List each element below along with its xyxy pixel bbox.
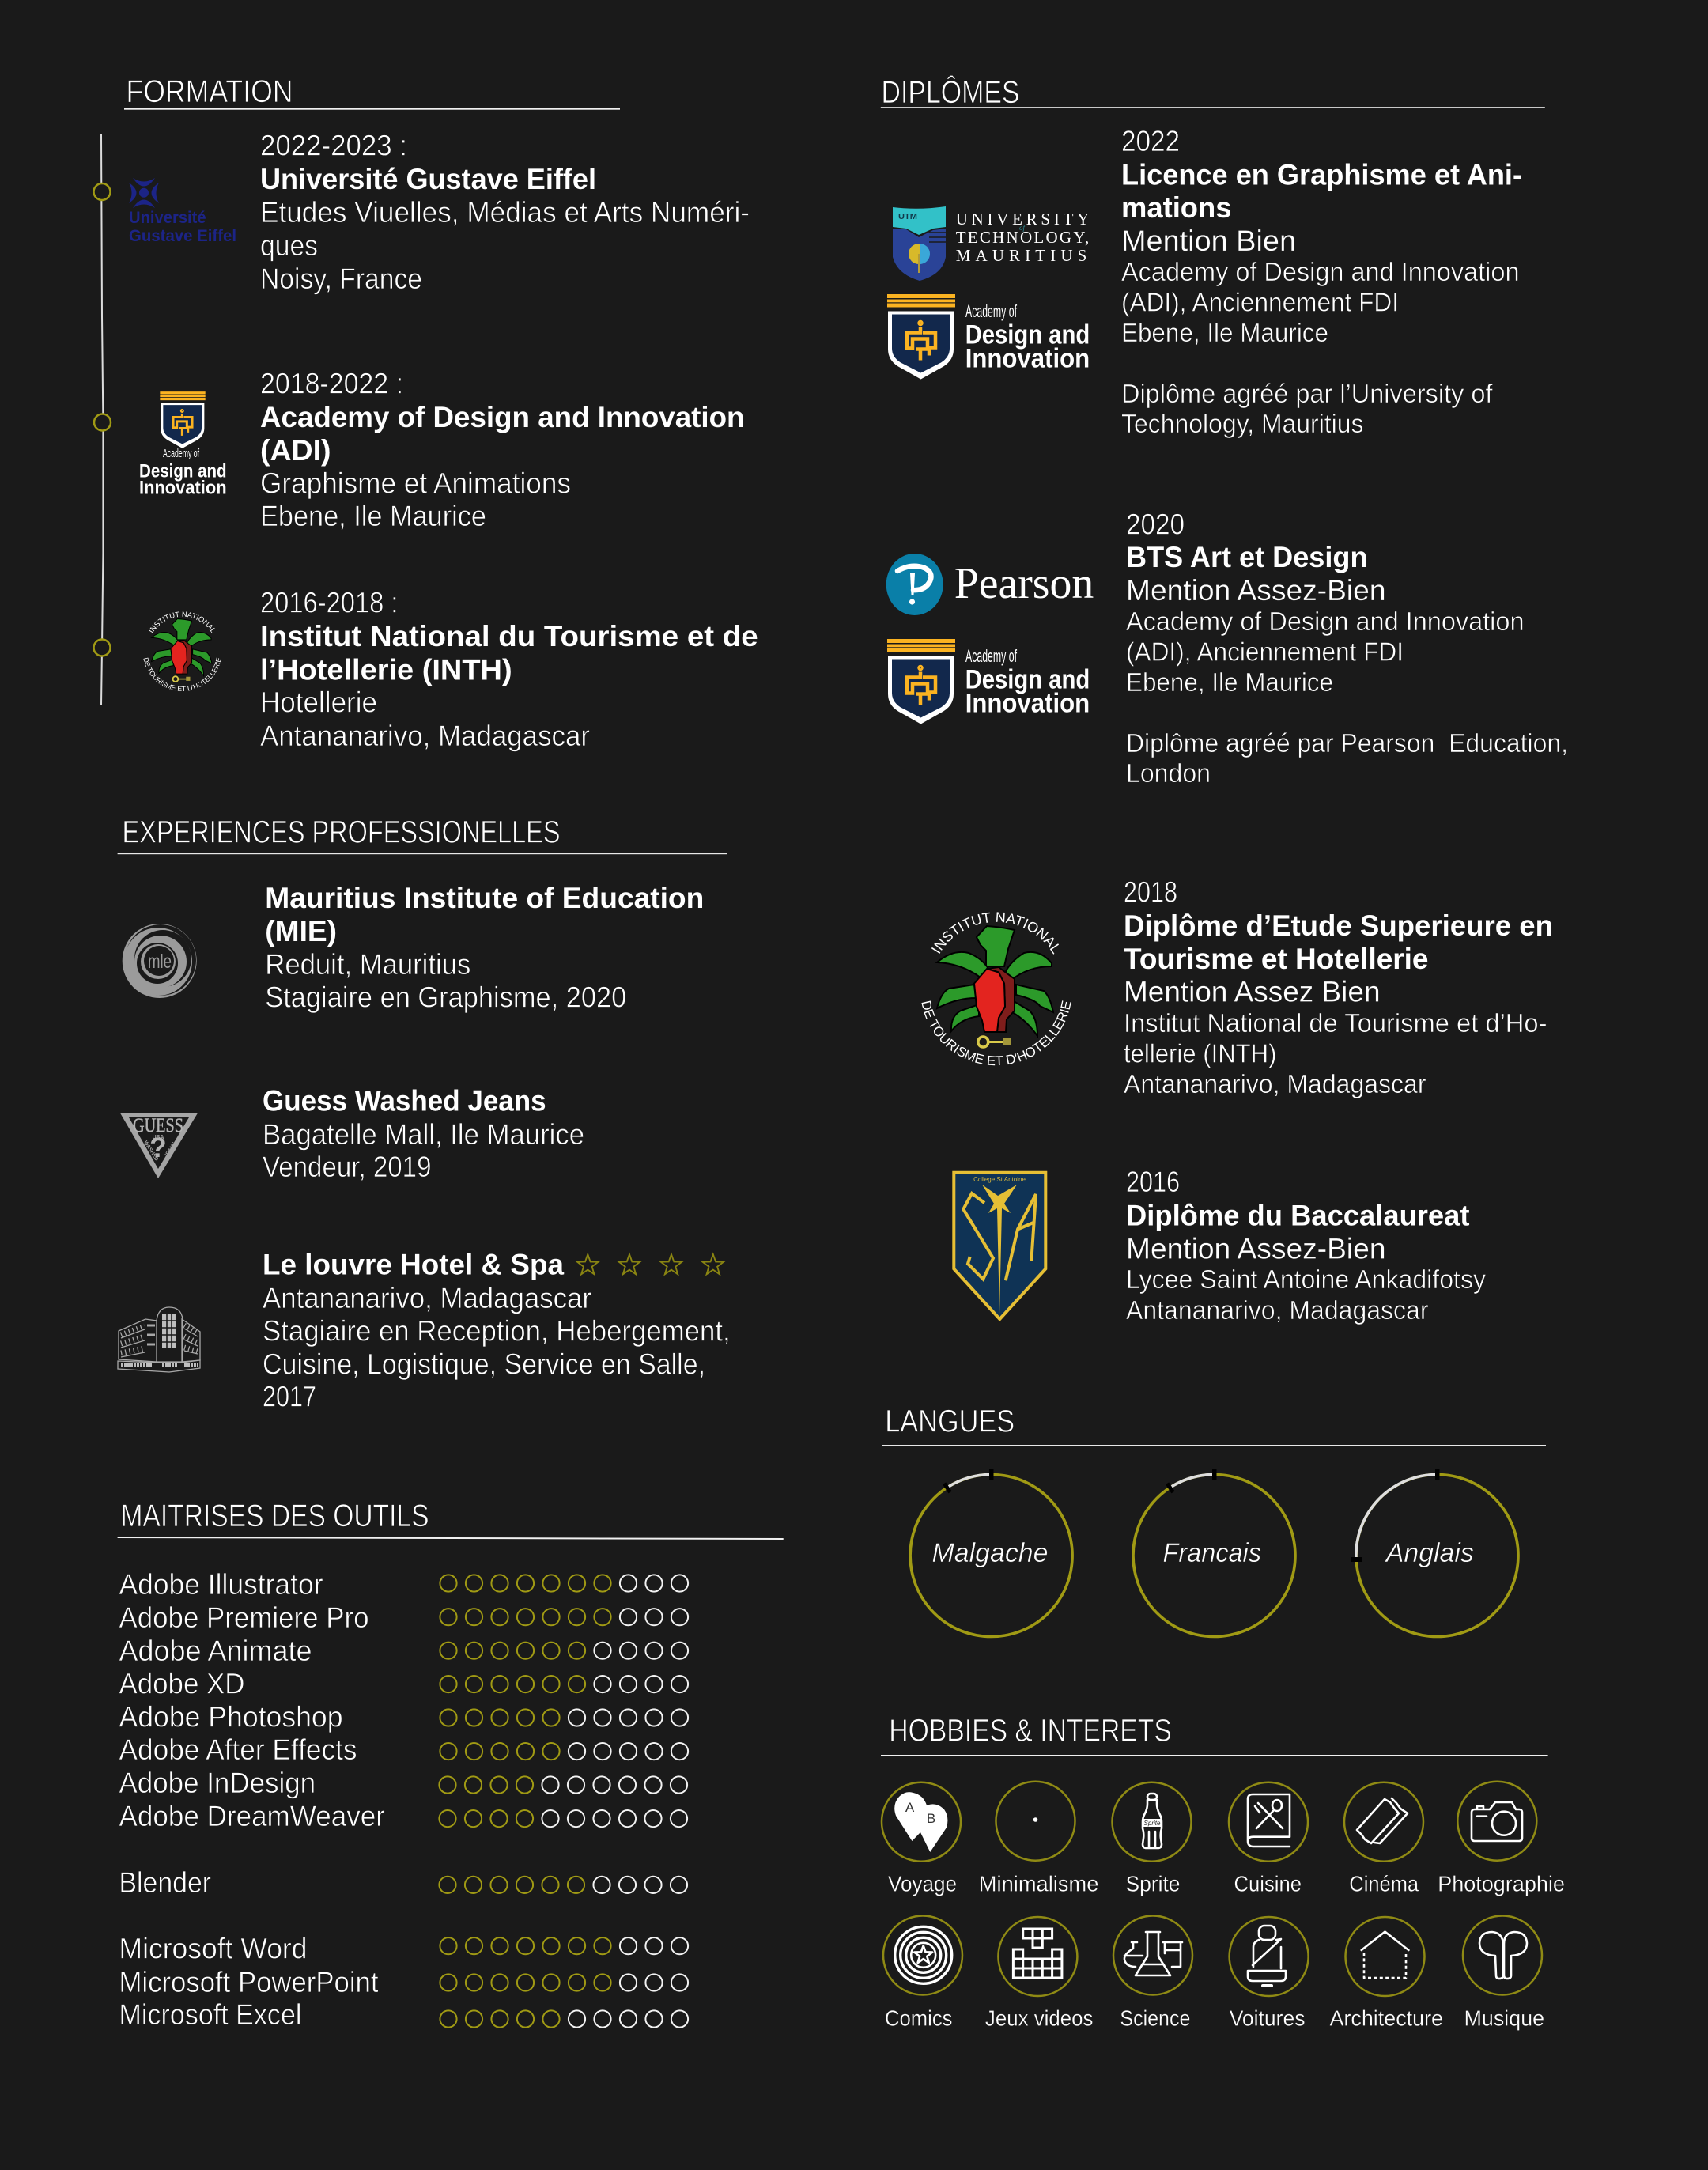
text: Le louvre Hotel & Spa: 2017 [263,1381,316,1413]
text: Academy of Design and Innovation: Graphisme et Animations [260,467,571,500]
text: Institut National du Tourisme: l’Hotellerie (INTH) [260,653,512,686]
panel: experiences professionnelles [118,815,731,1413]
text: diplome d'etude: Institut National de Tourisme et d’Ho- [1124,1008,1547,1038]
text: BTS: Diplôme agréé par Pearson Education, [1126,728,1568,758]
hobby: cuisine: Cuisine [1234,1872,1302,1896]
logo: Guess: USA [153,1135,164,1140]
logo: Pearson [886,554,1094,615]
text: BTS: Academy of Design and Innovation [1126,607,1525,636]
panel: maitrises des outils [118,1499,784,2031]
logo: Université Gustave Eiffel: Gustave Eiffel [129,227,236,245]
text: licence: Technology, Mauritius [1121,409,1363,438]
text: Guess Washed Jeans: Bagatelle Mall, Ile Maurice [263,1118,584,1151]
text: baccalaureat: Lycee Saint Antoine Ankadifotsy [1126,1265,1486,1294]
logo: Institut National du Tourisme [143,611,221,691]
hobby: voyage: Voyage [888,1872,957,1896]
logo: Guess: JEANS [164,1140,178,1159]
gauge: Anglais: Anglais [1385,1538,1474,1568]
heading: diplomes: DIPLÔMES [881,74,1020,110]
logo: University of Technology Mauritius: MAURITIUS [956,246,1086,265]
tool labels: Adobe XD [119,1668,245,1700]
text: baccalaureat: Diplôme du Baccalaureat [1126,1199,1469,1232]
tool labels [119,1568,385,2031]
text: Institut National du Tourisme: Institut National du Tourisme et de [260,620,758,652]
tool labels: Adobe Photoshop [119,1701,343,1733]
text: BTS: (ADI), Anciennement FDI [1126,637,1404,666]
hobby: musique [1463,1915,1544,2031]
logo: University of Technology Mauritius [893,206,1089,281]
logo: College Saint Antoine shield: College St Antoine [973,1176,1026,1183]
heading: langues: LANGUES [885,1404,1015,1439]
text: BTS [1126,508,1568,788]
logo: Academy of Design and Innovation: Academy of [163,447,199,460]
tool labels: Adobe Illustrator [119,1568,323,1601]
logo: Louvre hotel building [118,1307,200,1372]
text: diplome d'etude: tellerie (INTH) [1124,1038,1276,1068]
logo: University of Technology Mauritius: TECHNOLOGY, [956,228,1089,247]
tool labels: Adobe InDesign [119,1767,316,1799]
text: licence: Academy of Design and Innovation [1121,257,1520,286]
logo: Academy of Design and Innovation [887,294,1090,380]
logo: Pearson: Pearson [954,559,1094,608]
panel: formation [93,74,758,752]
logo: Guess [120,1113,198,1178]
logo: Université Gustave Eiffel: Université [129,209,206,227]
hobby: voitures [1230,1917,1309,2031]
text: Institut National du Tourisme [260,587,758,752]
logo: Université Gustave Eiffel [129,178,236,245]
text: licence: mations [1121,191,1232,224]
panel: diplomes [881,74,1568,1325]
gauge: Malgache: Malgache [931,1538,1049,1568]
icon: four stars [577,1254,724,1274]
tool labels: Blender [119,1866,211,1899]
hobby: minimalisme: Minimalisme [979,1872,1098,1896]
hobby: architecture [1330,1917,1443,2031]
logo: MIE: mle [148,951,172,973]
text: Université Gustave Eiffel: Université Gustave Eiffel [260,163,596,195]
panel: hobbies et interets [881,1714,1565,2031]
hobby: musique: Musique [1464,2006,1544,2031]
hobby: comics: Comics [885,2006,952,2031]
text: licence: Licence en Graphisme et Ani- [1121,158,1522,191]
text: Academy of Design and Innovation: 2018-2022 : [260,367,403,400]
hobby: photographie: Photographie [1438,1872,1565,1896]
text: Université Gustave Eiffel [260,130,750,295]
gauge: Malgache [910,1469,1072,1637]
gauge: Anglais [1351,1469,1518,1637]
text: Université Gustave Eiffel: 2022-2023 : [260,130,407,162]
text: baccalaureat: Mention Assez-Bien [1126,1232,1385,1265]
text: baccalaureat: 2016 [1126,1166,1180,1198]
text: Le louvre Hotel & Spa: Cuisine, Logistique, Service en Salle, [263,1348,705,1380]
text: licence: Mention Bien [1121,225,1296,257]
text: Institut National du Tourisme: 2016-2018 : [260,587,399,618]
text: Academy of Design and Innovation [260,367,745,532]
text: licence: Diplôme agréé par l’University of [1121,379,1493,408]
logo: Academy of Design and Innovation: Innovation [965,689,1090,719]
gauge: Francais [1133,1469,1295,1637]
text: diplome d'etude: Tourisme et Hotellerie [1124,943,1428,975]
text: Mauritius Institute of Education: (MIE) [265,915,337,947]
hobby: sprite: Sprite [1126,1872,1180,1896]
text: Mauritius Institute of Education: Reduit, Mauritius [265,948,470,981]
heading: hobbies: HOBBIES & INTERETS [889,1714,1172,1748]
text: licence: Ebene, Ile Maurice [1121,318,1328,347]
text: Academy of Design and Innovation: Academy of Design and Innovation [260,401,745,433]
text: licence: 2022 [1121,125,1180,157]
text: BTS: BTS Art et Design [1126,541,1368,573]
text: Le louvre Hotel & Spa [263,1249,731,1413]
hobby: architecture: Architecture [1330,2006,1443,2031]
text: Institut National du Tourisme: Antananarivo, Madagascar [260,720,590,752]
text: Academy of Design and Innovation: (ADI) [260,434,331,467]
text: Institut National du Tourisme: Hotellerie [260,686,377,718]
text: licence: (ADI), Anciennement FDI [1121,287,1399,316]
tool labels: Adobe DreamWeaver [119,1800,385,1832]
text: licence [1121,125,1522,438]
logo: University of Technology Mauritius: of [1019,224,1026,232]
text: Le louvre Hotel & Spa: Stagiaire en Reception, Hebergement, [263,1314,731,1347]
hobby: cuisine [1229,1782,1308,1896]
logo: Guess: ? [149,1132,167,1163]
logo: Academy of Design and Innovation: Innovation [965,344,1090,374]
hobby: sprite [1112,1782,1191,1896]
hobby: voyage: B [927,1811,935,1826]
tool labels: Microsoft PowerPoint [119,1966,379,1998]
logo: Academy of Design and Innovation: Design and [139,461,227,482]
hobby: cinema: Cinéma [1349,1872,1419,1896]
logo: University of Technology Mauritius: UTM [898,213,917,221]
hobby: voitures: Voitures [1230,2006,1305,2031]
text: Université Gustave Eiffel: Etudes Viuelles, Médias et Arts Numéri- [260,196,750,229]
heading: maitrises: MAITRISES DES OUTILS [120,1499,429,1533]
heading: experiences: EXPERIENCES PROFESSIONELLES [122,815,560,850]
hobby: science: Science [1120,2006,1190,2031]
tool labels: Adobe Premiere Pro [119,1601,368,1634]
tool labels: Adobe Animate [119,1635,312,1667]
heading: formation: FORMATION [127,74,293,109]
logo: Institut National du Tourisme large: INSTITUT NATIONAL [931,912,1059,955]
text: Guess Washed Jeans [263,1084,584,1183]
hobby: jeux videos [985,1917,1093,2031]
gauge: Francais: Francais [1162,1538,1261,1568]
logo: Guess: GUESS [133,1115,183,1136]
logo: Academy of Design and Innovation: Academy of [965,646,1017,666]
text: Université Gustave Eiffel: Noisy, France [260,263,422,295]
tool labels: Microsoft Word [119,1932,307,1964]
hobby: photographie [1438,1782,1565,1896]
text: diplome d'etude: Antananarivo, Madagascar [1124,1069,1426,1098]
logo: Institut National du Tourisme: DE TOURISME ET D'HOTELLERIE [143,658,221,691]
text: Mauritius Institute of Education: Stagiaire en Graphisme, 2020 [265,981,626,1014]
logo: University of Technology Mauritius: UNIVERSITY [956,210,1089,229]
logo: Guess: WASHED [142,1140,160,1162]
hobby: minimalisme [979,1782,1098,1896]
text: Mauritius Institute of Education: Mauritius Institute of Education [265,882,704,914]
text: Guess Washed Jeans: Guess Washed Jeans [263,1084,546,1117]
hobby: cinema [1344,1782,1423,1896]
logo: Academy of Design and Innovation [887,639,1090,724]
text: Université Gustave Eiffel: ques [260,229,318,262]
logo: Academy of Design and Innovation: Innovation [139,477,227,498]
text: BTS: London [1126,758,1211,788]
hobby: voyage [882,1782,961,1896]
hobby: voyage: A [905,1800,915,1815]
panel: langues [882,1404,1546,1637]
text: baccalaureat [1126,1166,1486,1325]
logo: College Saint Antoine shield [954,1173,1045,1319]
text: diplome d'etude: Diplôme d’Etude Superieure en [1124,909,1553,942]
text: BTS: Ebene, Ile Maurice [1126,667,1333,697]
logo: Academy of Design and Innovation: Design and [965,319,1090,350]
text: Le louvre Hotel & Spa: Antananarivo, Madagascar [263,1282,591,1314]
logo: Academy of Design and Innovation: Academy of [965,301,1017,321]
text: BTS: Mention Assez-Bien [1126,574,1385,607]
logo: Academy of Design and Innovation [139,391,227,498]
logo: Academy of Design and Innovation: Design and [965,664,1090,694]
text: baccalaureat: Antananarivo, Madagascar [1126,1295,1429,1325]
text: diplome d'etude [1124,876,1553,1098]
tool labels: Microsoft Excel [119,1998,302,2031]
text: diplome d'etude: 2018 [1124,876,1177,909]
hobby: jeux videos: Jeux videos [985,2006,1093,2031]
text: Le louvre Hotel & Spa: Le louvre Hotel & Spa [263,1249,564,1281]
logo: Institut National du Tourisme large: DE TOURISME ET D'HOTELLERIE [921,1000,1071,1066]
hobby: sprite: Sprite [1144,1820,1161,1827]
text: Mauritius Institute of Education [265,882,704,1014]
hobby: comics [883,1915,962,2031]
logo: MIE [123,924,197,998]
text: Academy of Design and Innovation: Ebene, Ile Maurice [260,500,486,532]
logo: Institut National du Tourisme large [921,912,1071,1066]
hobby: science [1113,1915,1192,2031]
text: diplome d'etude: Mention Assez Bien [1124,976,1381,1008]
tool labels: Adobe After Effects [119,1733,357,1766]
timeline [93,134,111,705]
text: Guess Washed Jeans: Vendeur, 2019 [263,1151,432,1183]
text: BTS: 2020 [1126,508,1185,540]
skill rating dots [439,1575,688,2028]
logo: Institut National du Tourisme: INSTITUT NATIONAL [149,611,215,633]
